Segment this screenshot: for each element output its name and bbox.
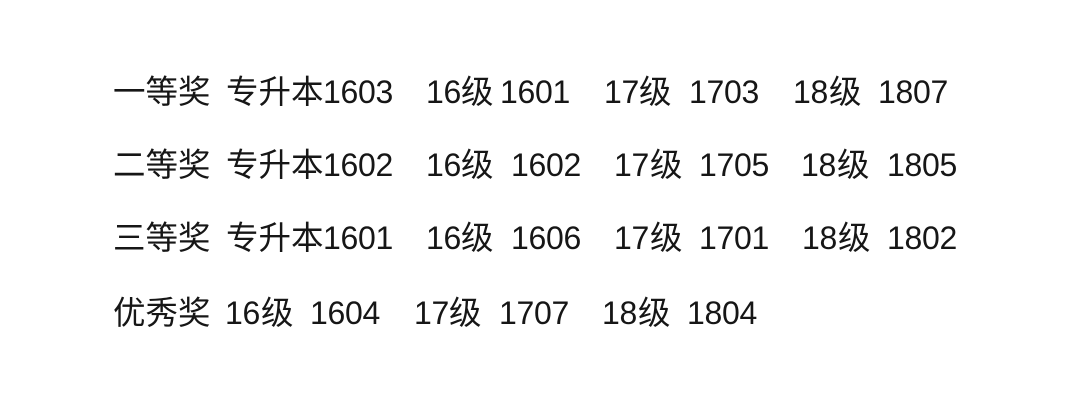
text row: first prize: 16 xyxy=(426,74,461,110)
text row: third prize: 三等奖 xyxy=(113,220,211,256)
text row: second prize: 1705 xyxy=(699,147,769,183)
text row: excellence award: 18 xyxy=(602,295,637,331)
text row: excellence award: 1604 xyxy=(310,295,380,331)
text row: second prize: 1602 xyxy=(511,147,581,183)
text row: excellence award: 16 xyxy=(225,295,260,331)
text row: third prize: 1606 xyxy=(511,220,581,256)
text row: first prize: 17 xyxy=(604,74,639,110)
text row: excellence award: 1707 xyxy=(499,295,569,331)
text row: third prize: 1802 xyxy=(887,220,957,256)
text row: third prize xyxy=(113,220,957,256)
text row: first prize: 级 xyxy=(461,74,494,110)
text row: first prize: 1807 xyxy=(878,74,948,110)
text row: third prize: 级 xyxy=(650,220,683,256)
text row: second prize: 级 xyxy=(461,147,494,183)
text row: third prize: 17 xyxy=(614,220,649,256)
text row: third prize: 18 xyxy=(802,220,837,256)
text row: first prize: 1601 xyxy=(500,74,570,110)
text row: third prize: 级 xyxy=(838,220,871,256)
text row: first prize xyxy=(113,74,948,110)
text row: third prize: 1601 xyxy=(323,220,393,256)
text row: second prize: 17 xyxy=(614,147,649,183)
text row: first prize: 1703 xyxy=(689,74,759,110)
text row: second prize: 二等奖 xyxy=(113,147,211,183)
text row: excellence award: 1804 xyxy=(687,295,757,331)
text row: second prize: 级 xyxy=(837,147,870,183)
text row: first prize: 1603 xyxy=(323,74,393,110)
text row: third prize: 专升本 xyxy=(226,220,324,256)
text row: excellence award: 优秀奖 xyxy=(113,295,211,331)
text row: third prize: 1701 xyxy=(699,220,769,256)
text row: first prize: 18 xyxy=(793,74,828,110)
text row: excellence award xyxy=(113,295,757,331)
text row: excellence award: 级 xyxy=(449,295,482,331)
text row: excellence award: 17 xyxy=(414,295,449,331)
text row: first prize: 级 xyxy=(829,74,862,110)
text row: second prize: 18 xyxy=(801,147,836,183)
text row: second prize: 级 xyxy=(650,147,683,183)
text row: second prize: 16 xyxy=(426,147,461,183)
text row: excellence award: 级 xyxy=(261,295,294,331)
text row: second prize: 专升本 xyxy=(226,147,324,183)
text row: third prize: 16 xyxy=(426,220,461,256)
text row: first prize: 级 xyxy=(639,74,672,110)
text row: first prize: 专升本 xyxy=(226,74,324,110)
text row: excellence award: 级 xyxy=(638,295,671,331)
text row: second prize: 1602 xyxy=(323,147,393,183)
text row: third prize: 级 xyxy=(461,220,494,256)
text row: second prize: 1805 xyxy=(887,147,957,183)
text row: first prize: 一等奖 xyxy=(113,74,211,110)
text row: second prize xyxy=(113,147,957,183)
